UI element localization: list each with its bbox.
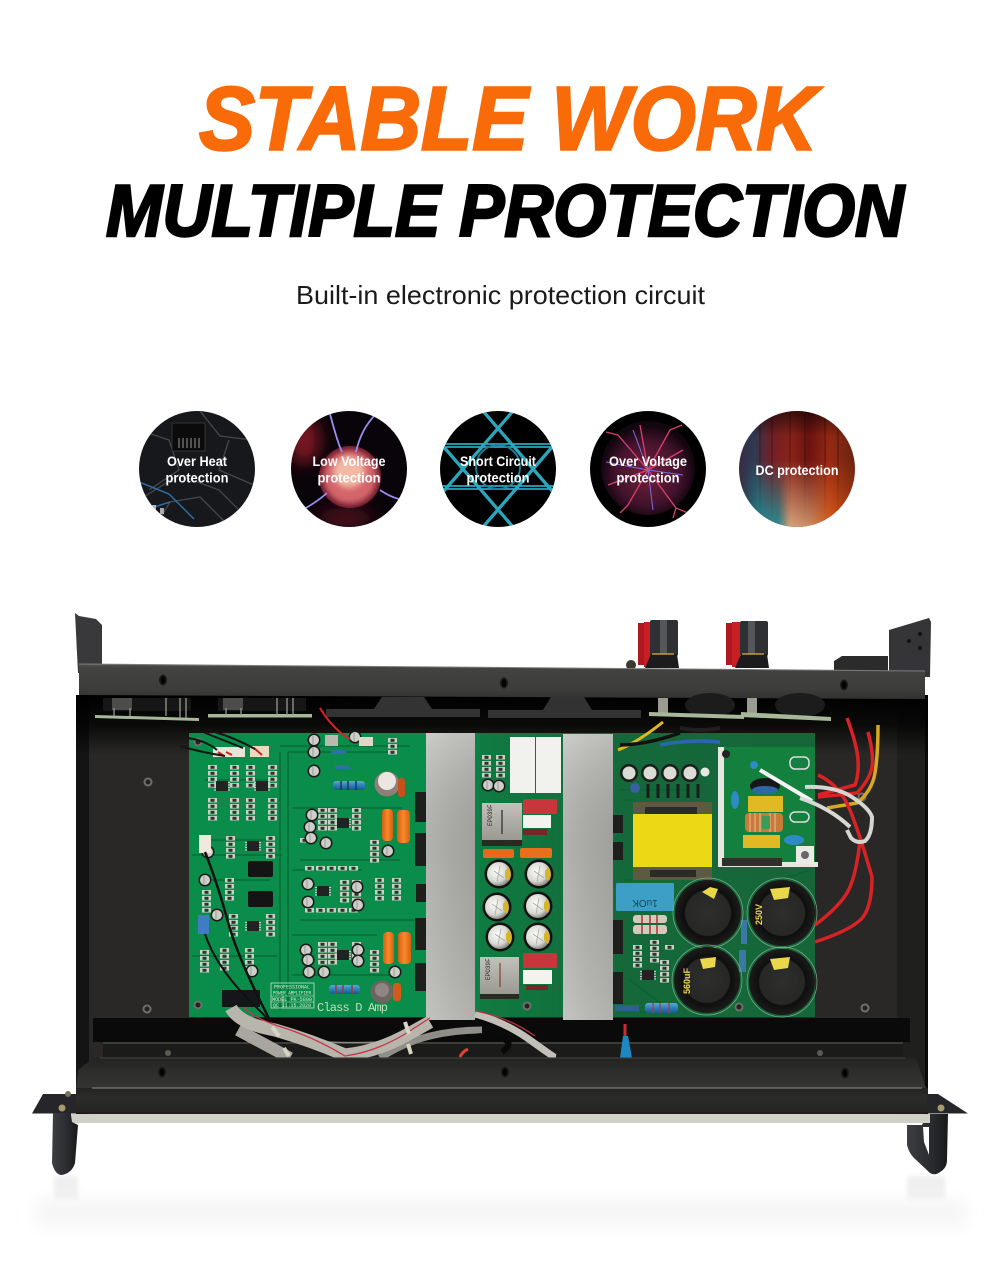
cable ties <box>272 1022 411 1056</box>
main filter capacitors: 560uF <box>682 967 692 994</box>
orange capacitors <box>382 809 411 964</box>
title: STABLE WORK: STABLE WORK <box>199 70 823 170</box>
main filter capacitors <box>672 878 817 1017</box>
rear rail <box>79 664 925 699</box>
badge: DC protection <box>739 411 855 527</box>
fans <box>326 697 641 718</box>
heat sinks <box>426 733 613 1020</box>
yellow and blue PSU wires <box>618 722 663 750</box>
heading: MULTIPLE PROTECTION: MULTIPLE PROTECTION <box>106 171 905 252</box>
output inductors <box>480 803 522 999</box>
main filter capacitors: 250V <box>754 904 764 925</box>
QC label box: QC 11.15.2020 <box>273 1003 311 1009</box>
mains wires <box>818 718 858 795</box>
QC label box: POWER AMPLIFIER <box>273 990 311 996</box>
right rack ear <box>889 618 931 677</box>
ribbon cables <box>238 1030 290 1058</box>
badge: low voltage protection <box>288 411 407 528</box>
badge: over voltage protection: protection <box>616 470 680 486</box>
blue terminal <box>624 1024 626 1036</box>
power resistors <box>633 915 667 934</box>
left mounting ear and handle <box>32 1091 78 1175</box>
input signal wires <box>320 708 350 739</box>
badge: DC protection: DC protection <box>756 463 838 478</box>
QC label box: PROFESSIONAL <box>274 984 310 990</box>
chassis interior <box>76 695 928 1115</box>
blue mains capacitor <box>616 883 674 911</box>
power socket <box>834 656 888 671</box>
floor reflection <box>36 1176 966 1226</box>
mains filter sub-board <box>718 747 818 867</box>
right mounting ear and handle <box>907 1094 968 1174</box>
rear input boards <box>95 698 312 721</box>
left rack ear <box>75 613 102 673</box>
badge: low voltage protection: Low Voltage <box>312 454 386 469</box>
subtitle: Built-in electronic protection circuit <box>296 280 706 310</box>
pad clusters <box>200 738 674 982</box>
white output capacitors <box>510 737 561 793</box>
QC label box: MODEL PK-5800 <box>272 997 312 1003</box>
output boards <box>649 693 831 721</box>
mosfets along heat sink <box>415 792 623 1004</box>
circuit board <box>189 730 818 1020</box>
red and white film capacitors <box>483 799 557 990</box>
badge: over heat protection <box>139 411 260 527</box>
large electrolytic capacitors, left area <box>370 772 405 1004</box>
Class D Amp silk text: Class D Amp <box>317 1001 388 1015</box>
binding posts <box>626 620 769 670</box>
badge: low voltage protection: protection <box>318 470 380 486</box>
badge: over voltage protection <box>590 411 706 527</box>
small PSU capacitors <box>620 764 710 798</box>
traces <box>192 746 810 1015</box>
badge: short circuit protection <box>440 411 556 527</box>
badge: over heat protection: protection <box>166 470 228 486</box>
front rail <box>76 1058 928 1113</box>
wiring <box>180 708 878 1058</box>
ICs <box>214 781 656 980</box>
blue resistors <box>329 750 747 1013</box>
output inductors: EPO39F <box>485 958 492 980</box>
transformer <box>633 802 712 880</box>
blue mains capacitor: 1uOK <box>632 897 658 908</box>
connectors <box>198 735 373 1007</box>
amplifier chassis, top view <box>32 613 968 1175</box>
QC label box <box>271 983 314 1009</box>
small capacitors, left area <box>198 730 494 978</box>
front panel edge <box>72 1114 930 1123</box>
badge: short circuit protection: Short Circuit <box>460 454 536 469</box>
badge: over heat protection: Over Heat <box>167 454 227 469</box>
output inductors: EPO39F <box>487 804 494 826</box>
badge: over voltage protection: Over Voltage <box>609 454 687 469</box>
output filter capacitors <box>482 860 554 952</box>
badge: short circuit protection: protection <box>466 470 530 486</box>
